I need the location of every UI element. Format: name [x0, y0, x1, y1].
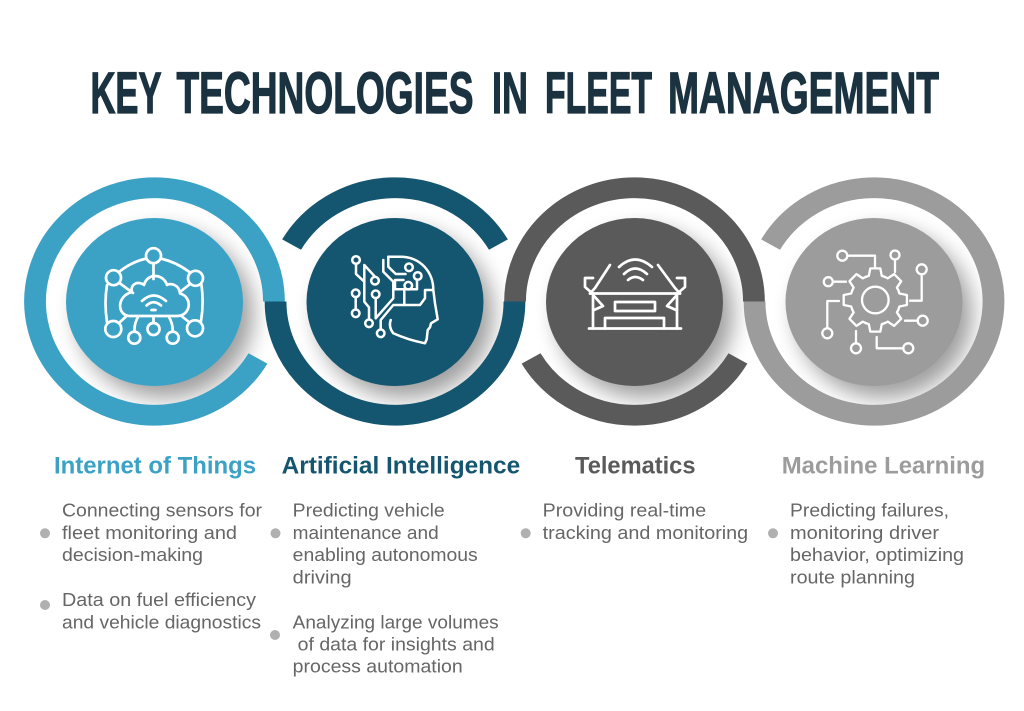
ring: internet of things [35, 188, 274, 415]
disk shadow [796, 230, 972, 398]
icon: AI head [352, 256, 438, 343]
bullet text: Providing real-time [543, 500, 706, 521]
bullet text: Data on fuel efficiency [62, 589, 257, 610]
panel: Internet of Things [35, 188, 274, 632]
ring: lower arc [531, 358, 738, 415]
bullet dot [270, 528, 280, 538]
ring: lower arc [276, 302, 514, 415]
disk [546, 218, 723, 386]
bullet dot [270, 630, 280, 640]
bullet text: of data for insights and [298, 634, 495, 654]
bullet text: fleet monitoring and [62, 522, 237, 543]
bullet text [293, 500, 478, 588]
heading: Machine Learning [782, 452, 985, 480]
ring: top arc [292, 188, 498, 245]
disk [66, 218, 243, 386]
bullet text: route planning [790, 566, 915, 588]
bullet text: decision-making [62, 544, 203, 565]
icon: gear with circuits [822, 250, 928, 353]
bullet text: Analyzing large volumes [293, 611, 499, 632]
bullet text: maintenance and [293, 522, 439, 543]
bullet text: driving [293, 566, 352, 588]
panel: Telematics [515, 188, 754, 543]
bullet text [293, 611, 499, 677]
bullet text: process automation [293, 656, 463, 677]
bullet text: monitoring driver [790, 522, 939, 543]
title: KEY [90, 61, 162, 126]
disk [786, 218, 962, 386]
panel: Machine Learning [755, 188, 993, 588]
disk shadow [77, 230, 253, 398]
heading: Internet of Things [54, 452, 256, 480]
title: FLEET [545, 61, 652, 126]
bullet dot [768, 528, 778, 538]
disk [306, 218, 484, 386]
icon: connected car [585, 260, 685, 328]
title: IN [492, 61, 528, 126]
ring: top arc [515, 188, 754, 302]
bullet text: Predicting vehicle [293, 500, 445, 521]
panel: Artificial Intelligence [270, 188, 520, 677]
bullet dot [40, 600, 50, 610]
bullet text [790, 500, 964, 588]
bullet text: behavior, optimizing [790, 544, 964, 565]
bullet text: Connecting sensors for [62, 500, 262, 521]
heading: Telematics [575, 452, 696, 480]
title [90, 61, 939, 126]
bullet text [62, 589, 261, 632]
bullet text: enabling autonomous [293, 544, 478, 565]
bullet dot [40, 528, 50, 538]
bullet text [62, 500, 262, 565]
ring: sweep [755, 188, 993, 415]
icon: cloud network [105, 248, 203, 344]
bullet text: tracking and monitoring [543, 522, 748, 543]
bullet text: Predicting failures, [790, 500, 949, 521]
disk shadow [557, 230, 733, 398]
heading: Artificial Intelligence [282, 452, 520, 480]
bullet text [543, 500, 748, 543]
bullet text: and vehicle diagnostics [62, 611, 261, 632]
bullet dot [521, 528, 531, 538]
disk shadow [317, 230, 493, 398]
title: TECHNOLOGIES [176, 61, 474, 126]
